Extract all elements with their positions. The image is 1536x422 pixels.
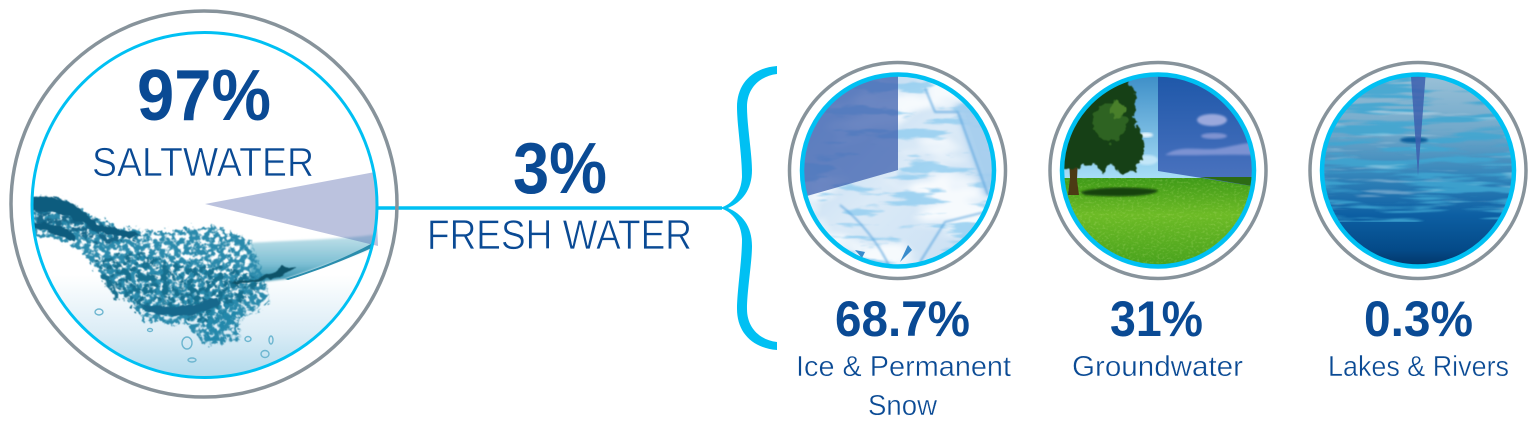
stat: 3%: 3% <box>513 129 607 209</box>
tree canopy <box>1058 78 1146 174</box>
label: fresh water: FRESH WATER <box>427 211 692 258</box>
tree trunk <box>1068 166 1079 195</box>
label: groundwater: Groundwater <box>1072 351 1243 383</box>
label: saltwater: SALTWATER <box>92 139 314 185</box>
ring: outer grey <box>1050 62 1266 278</box>
ring: outer grey <box>11 11 397 397</box>
ring: inner cyan <box>1062 74 1254 266</box>
ring: inner cyan <box>802 74 994 266</box>
stat: 97%: 97% <box>137 56 271 136</box>
photo: water ripples <box>1320 70 1516 270</box>
photo: ice <box>804 76 992 264</box>
photo: tree and meadow <box>1064 76 1252 264</box>
stat: 31%: 31% <box>1110 291 1203 347</box>
brace <box>720 66 777 350</box>
connector line: saltwater to fresh water brace <box>378 206 722 210</box>
wedge: 31 percent share <box>1158 76 1252 186</box>
panel: groundwater <box>1050 62 1266 383</box>
label: lakes and rivers: Lakes & Rivers <box>1328 351 1509 383</box>
panel: lakes and rivers <box>1310 62 1526 383</box>
stat: 68.7%: 68.7% <box>835 291 970 347</box>
ring: outer grey <box>790 62 1006 278</box>
wedge: 0.3 percent share <box>1411 76 1426 175</box>
panel: saltwater circle <box>11 11 397 397</box>
label: snow: Snow <box>868 390 938 422</box>
photo: water splash <box>34 194 373 376</box>
panel: ice and permanent snow <box>790 62 1011 422</box>
wedge: 68.7 percent share <box>804 76 898 196</box>
ring: inner cyan <box>1322 74 1514 266</box>
ring: inner cyan <box>32 32 377 378</box>
wedge: 3 percent slice <box>205 172 378 246</box>
ring: outer grey <box>1310 62 1526 278</box>
stat: 0.3%: 0.3% <box>1364 291 1473 347</box>
label: ice and permanent: Ice & Permanent <box>796 351 1011 383</box>
tree shadow <box>1080 188 1158 196</box>
